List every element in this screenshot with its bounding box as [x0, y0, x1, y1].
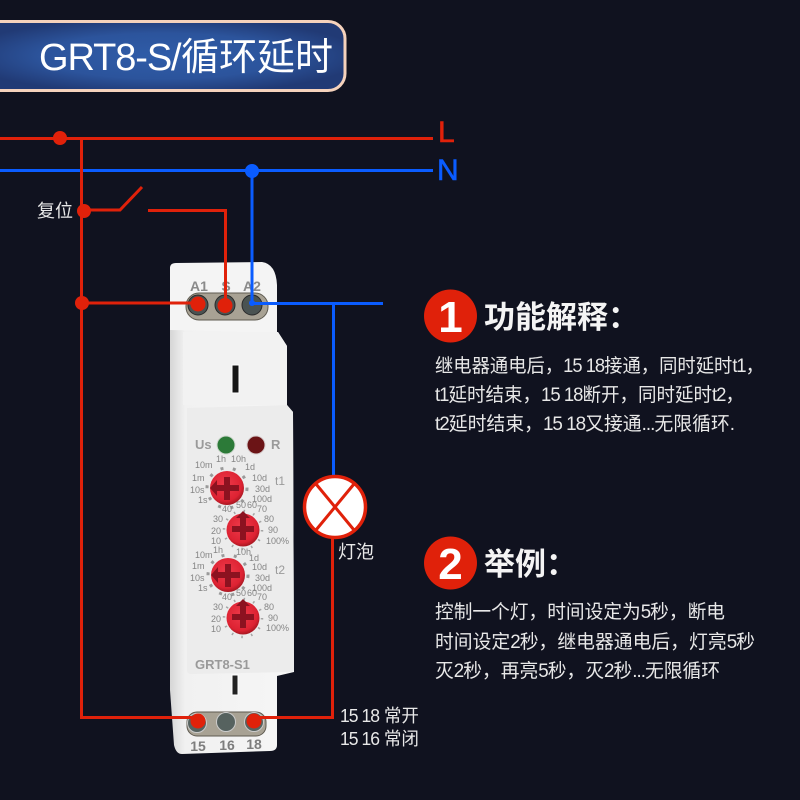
neutral wiring — [246, 166, 383, 480]
dial percent 2: 20 — [211, 614, 221, 624]
dial percent 2: 70 — [257, 592, 267, 602]
bottom terminal labels: 18 — [246, 736, 262, 752]
top terminal labels: S — [221, 278, 231, 294]
bottom terminal labels: 15 — [190, 738, 206, 754]
text block 2: 控制一个灯，时间设定为5秒，断电 — [435, 601, 725, 623]
lower slot — [232, 675, 238, 695]
L label: L — [438, 116, 455, 149]
top terminal strip — [186, 293, 268, 320]
contact notes: 15 18 常开 — [340, 706, 419, 726]
relay device body — [170, 262, 294, 754]
dial t1: 10h — [231, 454, 246, 464]
dial percent 2: 50 — [236, 588, 246, 598]
title text: GRT8-S/ — [39, 37, 182, 79]
lamp label: 灯泡 — [338, 538, 374, 564]
reset label: 复位 — [37, 197, 73, 223]
dial t2: 1h — [213, 545, 223, 555]
dial t2: 1d — [249, 553, 259, 563]
upper slot — [232, 365, 239, 393]
live wire L — [0, 137, 433, 140]
bottom terminal labels — [190, 736, 262, 754]
dial t1: 10s — [190, 485, 205, 495]
dial t2: 10h — [236, 547, 251, 557]
badge 2 — [424, 536, 477, 590]
dial percent 1: 50 — [236, 500, 246, 510]
bottom screws — [188, 712, 264, 732]
heading 2: 举例： — [484, 539, 577, 584]
dial percent 2: 30 — [213, 602, 223, 612]
dial t2: t2 — [275, 563, 285, 577]
dial percent 2 — [211, 588, 289, 637]
top terminal labels: A1 — [190, 278, 208, 294]
dial percent 2: 10 — [211, 624, 221, 634]
title banner — [0, 22, 345, 90]
dial percent 1: 30 — [213, 514, 223, 524]
text block 2: 时间设定2秒，继电器通电后，灯亮5秒 — [435, 631, 755, 653]
dial t1: 30d — [255, 484, 270, 494]
bottom terminal labels: 16 — [219, 737, 235, 753]
top screws — [188, 295, 262, 315]
model label: GRT8-S1 — [195, 657, 250, 672]
dial t1: 1h — [216, 454, 226, 464]
dial percent 2: 90 — [268, 613, 278, 623]
dial percent 2: 80 — [264, 602, 274, 612]
dial t2: 30d — [255, 573, 270, 583]
dial t2: 1m — [192, 561, 205, 571]
dial percent 2: 100% — [266, 623, 289, 633]
contact notes — [340, 706, 419, 749]
dial t2: 10s — [190, 573, 205, 583]
dial t2: 1s — [198, 583, 208, 593]
dial percent 1: 90 — [268, 525, 278, 535]
live wiring — [81, 138, 332, 718]
dial percent 1: 10 — [211, 536, 221, 546]
text block 2 — [435, 601, 755, 682]
contact notes: 15 16 常闭 — [340, 729, 419, 749]
dial percent 1: 40 — [222, 504, 232, 514]
text block 2: 灭2秒，再亮5秒，灭2秒...无限循环 — [435, 660, 720, 682]
top terminal labels: A2 — [243, 278, 261, 294]
dial t2: 100d — [252, 583, 272, 593]
dial percent 1 — [211, 500, 289, 549]
bottom terminal strip — [187, 712, 266, 736]
LED indicators: Us — [195, 437, 212, 452]
LED indicators: R — [271, 437, 281, 452]
top terminal labels — [190, 278, 261, 294]
dial percent 1: 60 — [247, 500, 257, 510]
dial t1: 1d — [245, 462, 255, 472]
dial percent 2: 60 — [247, 588, 257, 598]
dial t1 — [190, 454, 285, 508]
lamp icon — [304, 476, 366, 538]
dial t2 — [190, 545, 285, 595]
text block 1: t1延时结束，15 18断开，同时延时t2， — [435, 384, 744, 406]
dial t1: t1 — [275, 474, 285, 488]
badge 1: 1 — [438, 293, 463, 342]
dial t1: 10d — [252, 473, 267, 483]
heading 1: 功能解释： — [484, 292, 639, 337]
dial percent 1: 100% — [266, 536, 289, 546]
dial t1: 100d — [252, 494, 272, 504]
title text: 循环延时 — [181, 26, 333, 81]
junction dots — [53, 131, 262, 728]
dial t1: 10m — [195, 460, 213, 470]
dial percent 1: 70 — [257, 504, 267, 514]
A2 terminal blue dot — [249, 300, 255, 306]
dial t1: 1m — [192, 473, 205, 483]
dial t2: 10d — [252, 562, 267, 572]
dial percent 1: 80 — [264, 514, 274, 524]
dial percent 1: 20 — [211, 526, 221, 536]
dial t2: 10m — [195, 550, 213, 560]
text block 1: 继电器通电后，15 18接通，同时延时t1， — [435, 355, 764, 377]
badge 2: 2 — [438, 540, 463, 589]
dial percent 2: 40 — [222, 592, 232, 602]
text block 1: t2延时结束，15 18又接通...无限循环. — [435, 413, 735, 435]
badge 1 — [424, 290, 477, 342]
neutral wire N — [0, 169, 433, 172]
N label: N — [437, 154, 459, 187]
LED indicators — [195, 436, 281, 454]
text block 1 — [435, 355, 764, 435]
dial t1: 1s — [198, 495, 208, 505]
